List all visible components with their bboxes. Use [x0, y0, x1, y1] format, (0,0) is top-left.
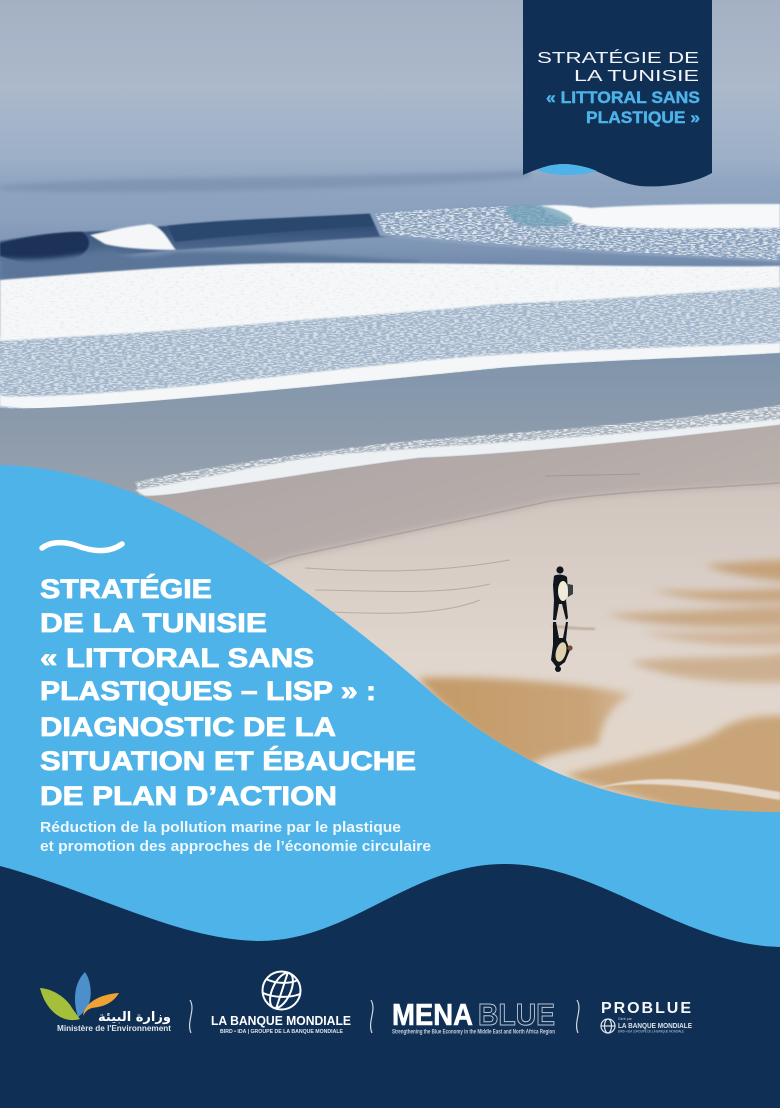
divider	[577, 1000, 579, 1033]
subtitle	[40, 820, 431, 855]
logo: PROBLUE: PROBLUE	[601, 1000, 691, 1017]
banner wave accent	[537, 164, 597, 175]
banner text: « LITTORAL SANS	[546, 89, 700, 107]
speckled mid water	[0, 282, 780, 410]
icon: orange leaf	[83, 993, 119, 1016]
distant swell	[0, 170, 530, 192]
logo: MENA Blue: MENA	[392, 997, 473, 1032]
foam band 1	[0, 263, 780, 341]
logo: Ministère de l'Environnement	[40, 972, 171, 1033]
white water	[90, 224, 176, 250]
dark navy footer wave	[0, 864, 780, 1108]
foam band 3	[135, 405, 780, 496]
icon: green leaf	[40, 988, 80, 1020]
icon: blue leaf	[75, 972, 91, 1017]
wave body	[0, 214, 400, 262]
icon: small globe	[601, 1019, 615, 1033]
logo: La Banque Mondiale: BIRD • IDA | GROUPE DE LA BANQUE MONDIALE	[220, 1029, 343, 1035]
main title	[40, 573, 416, 811]
light streak on tan sand	[590, 779, 780, 800]
foam band 2	[0, 343, 780, 409]
surfer and reflection	[551, 566, 595, 672]
subtitle: et promotion des approches de l’économie circulaire	[40, 839, 431, 855]
divider	[190, 1000, 192, 1033]
divider	[371, 1000, 373, 1033]
logo: La Banque Mondiale	[211, 969, 351, 1035]
logo: MENA Blue: BLUE	[478, 997, 555, 1032]
waterline edge	[265, 483, 780, 566]
top banner	[523, 0, 712, 186]
light blue wave panel	[0, 465, 780, 960]
main title: PLASTIQUES – LISP » :	[40, 676, 376, 706]
open sea	[0, 0, 780, 440]
banner text: LA TUNISIE	[574, 68, 699, 85]
banner ribbon	[523, 0, 712, 186]
banner text: PLASTIQUE »	[586, 109, 700, 127]
speckled crest	[370, 204, 780, 262]
dry sand	[230, 484, 780, 830]
main title: STRATÉGIE	[40, 573, 212, 604]
logo: MENA Blue	[392, 997, 555, 1036]
logo: PROBLUE: BIRD • IDA | GROUPE DE LA BANQUE MONDIALE	[618, 1030, 685, 1034]
logo: PROBLUE: Géré par	[618, 1017, 633, 1021]
main title: DIAGNOSTIC DE LA	[40, 712, 336, 742]
main title: « LITTORAL SANS	[40, 643, 314, 673]
logo: MENA Blue: Strengthening the Blue Economy in the Middle East and North Africa Region	[392, 1030, 555, 1036]
banner text: STRATÉGIE DE	[537, 48, 699, 67]
logo: PROBLUE	[601, 1000, 692, 1034]
wet sand	[100, 425, 780, 620]
subtitle: Réduction de la pollution marine par le plastique	[40, 820, 401, 836]
main title: SITUATION ET ÉBAUCHE	[40, 745, 416, 776]
logo: PROBLUE: LA BANQUE MONDIALE	[618, 1021, 692, 1030]
dark trough	[0, 250, 420, 280]
calm shallow water	[0, 353, 780, 500]
background photo: surfer on a beach	[0, 0, 780, 830]
tan sand patches	[418, 560, 780, 820]
sand ripple lines	[305, 474, 640, 613]
ministry name in Arabic: وزارة البيئة	[98, 1010, 171, 1025]
breaking wave	[0, 204, 780, 264]
main title: DE PLAN D’ACTION	[40, 781, 337, 811]
ministry name in French: Ministère de l'Environnement	[57, 1024, 171, 1033]
logo: La Banque Mondiale: LA BANQUE MONDIALE	[211, 1013, 351, 1028]
main title: DE LA TUNISIE	[40, 608, 267, 638]
banner text	[537, 48, 700, 127]
icon: globe	[262, 969, 300, 1012]
decorative title wave	[42, 543, 122, 551]
